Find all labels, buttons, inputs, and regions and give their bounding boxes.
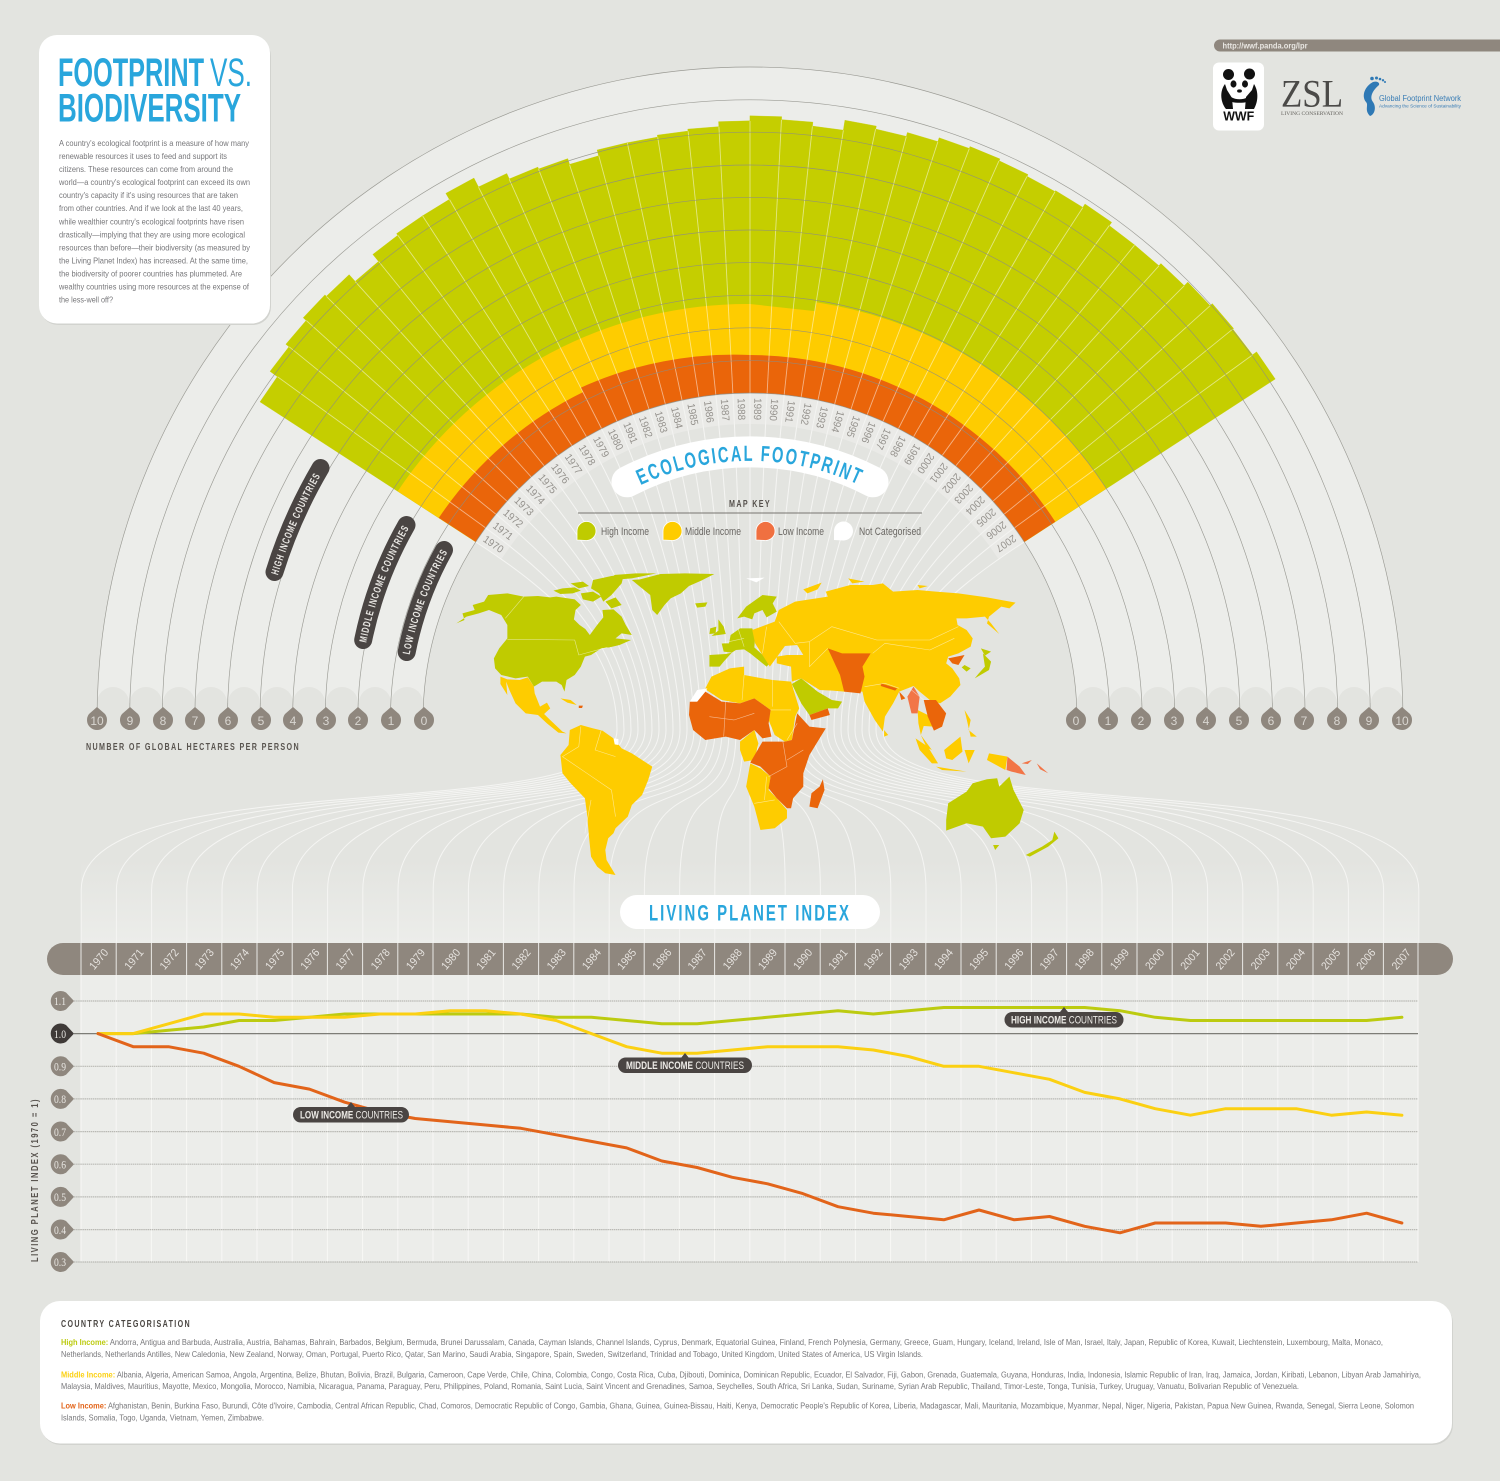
- ecological footprint radial chart: [97, 67, 1403, 734]
- low income list: [61, 1400, 1414, 1422]
- year labels around fan: 1975: [536, 472, 559, 497]
- year header bar: 1971: [122, 947, 146, 972]
- tag: low income countries: LOW INCOME COUNTRIES: [402, 550, 447, 654]
- y axis bubbles: 0.8: [54, 1092, 66, 1106]
- year labels around fan: 1991: [782, 400, 797, 423]
- hectare pins right: 6: [1268, 714, 1275, 728]
- middle income line: [98, 1011, 1402, 1115]
- year labels around fan: 1981: [620, 421, 640, 446]
- year header bar: 1973: [193, 947, 217, 972]
- year labels around fan: 2002: [939, 471, 963, 495]
- hectare pins left: 6: [225, 714, 232, 728]
- year header bar: 1990: [791, 947, 815, 972]
- high income line: [98, 1008, 1402, 1034]
- low income label: [293, 1102, 409, 1122]
- year header bar: 1989: [756, 947, 780, 972]
- year header bar: 1999: [1108, 947, 1132, 972]
- year labels around fan: 1977: [562, 452, 584, 477]
- year labels around fan: 1980: [605, 427, 625, 452]
- year labels around fan: 1998: [887, 434, 908, 459]
- logo: ZSL: LIVING CONSERVATION: [1281, 112, 1343, 117]
- year header bar: 1981: [474, 947, 498, 972]
- high income label: HIGH INCOME COUNTRIES: [1011, 1014, 1117, 1026]
- map key: High Income: [601, 526, 649, 538]
- year header bar: 1975: [263, 947, 287, 972]
- intro text: citizens. These resources can come from around the: [59, 164, 233, 174]
- year header bar: 1988: [721, 947, 745, 972]
- url bar: http://wwf.panda.org/lpr: [1222, 40, 1308, 50]
- year header bar: 2004: [1284, 947, 1308, 972]
- hectare pins right: 3: [1171, 714, 1178, 728]
- hectare pins left: 7: [192, 714, 199, 728]
- year header bar: 1982: [510, 947, 534, 972]
- panel: country categorisation: [40, 1301, 1453, 1445]
- year labels around fan: 1987: [718, 399, 731, 422]
- year labels around fan: 2005: [973, 506, 998, 529]
- title: BIODIVERSITY: [58, 86, 241, 130]
- hectare pins left: 4: [290, 714, 297, 728]
- low income line: [98, 1034, 1402, 1233]
- year labels around fan: 2001: [927, 460, 950, 485]
- flow lines from fan to chart columns: [81, 393, 1419, 943]
- middle income list: [61, 1370, 1421, 1391]
- hectare pins left: 2: [355, 714, 362, 728]
- hectare pins right: 4: [1203, 714, 1210, 728]
- year labels around fan: 1986: [701, 400, 716, 424]
- title: VS.: [210, 51, 252, 95]
- year header bar: 2006: [1354, 947, 1378, 972]
- year header bar: 1991: [826, 947, 850, 972]
- low income regions: [579, 648, 965, 808]
- year header bar: 1997: [1038, 947, 1062, 972]
- year labels around fan: 2006: [984, 518, 1009, 541]
- intro text: resources than before—their biodiversity (as measured by: [59, 242, 251, 252]
- world map: [446, 573, 1058, 875]
- intro text: world—a country's ecological footprint can exceed its own: [58, 177, 250, 187]
- low income label: LOW INCOME COUNTRIES: [300, 1110, 403, 1122]
- year header bar: 2000: [1143, 947, 1167, 972]
- year header bar: 1986: [650, 947, 674, 972]
- y axis bubbles: 0.9: [54, 1060, 66, 1074]
- year labels around fan: [481, 398, 1018, 556]
- inner disc and lower fade: [80, 393, 1420, 763]
- year header bar: 1985: [615, 947, 639, 972]
- hectare pins right: 8: [1334, 714, 1341, 728]
- hectare pins right: 10: [1395, 714, 1409, 728]
- year labels around fan: 1997: [873, 426, 893, 452]
- intro text: from other countries. And if we look at the last 40 years,: [59, 203, 243, 213]
- year labels around fan: 1983: [652, 410, 670, 434]
- high income wedges: [260, 116, 1275, 734]
- high income list: [61, 1337, 1383, 1359]
- hectare pins left: 10: [90, 714, 104, 728]
- year labels around fan: 1972: [501, 507, 525, 531]
- title: FOOTPRINT: [58, 51, 204, 95]
- middle income list: Malaysia, Maldives, Mauritius, Mayotte, Mexico, Mongolia, Morocco, Namibia, Nicaragua, Panama, Paraguay, Peru, Philippines, Poland, Romania, Saint Lucia, Saint Vincent and Grenadines, Samoa, Seychelles, South Africa, Sri Lanka, Sudan, Suriname, Syrian Arab Republic, Thailand, Timor-Leste, Tonga, Tunisia, Turkey, Uruguay, Vanuatu, Bolivarian Republic of Venezuela.: [61, 1381, 1299, 1391]
- y axis bubbles: 1.0: [54, 1027, 66, 1041]
- intro text: the less-well off?: [59, 295, 113, 305]
- middle income label: MIDDLE INCOME COUNTRIES: [626, 1060, 744, 1072]
- year header bar: 1994: [932, 947, 956, 972]
- year labels around fan: 1985: [684, 402, 700, 426]
- y axis bubbles: 0.5: [54, 1190, 66, 1204]
- year header bar: 1993: [897, 947, 921, 972]
- year labels around fan: 1990: [767, 398, 780, 421]
- year labels around fan: 1995: [843, 414, 862, 439]
- year header bar: 1987: [686, 947, 710, 972]
- hectares axis label: NUMBER OF GLOBAL HECTARES PER PERSON: [86, 741, 300, 753]
- living planet index heading: LIVING PLANET INDEX: [649, 900, 851, 926]
- intro text: [58, 138, 251, 305]
- map key: Low Income: [778, 526, 824, 538]
- logo: WWF: WWF: [1223, 110, 1255, 124]
- y axis bubbles: 0.7: [54, 1125, 66, 1139]
- year header bar: 1976: [298, 947, 322, 972]
- logo: Global Footprint Network: [1364, 76, 1462, 116]
- tag: high income countries: HIGH INCOME COUNTRIES: [271, 474, 320, 575]
- url bar: [1214, 40, 1500, 52]
- lighter low income regions: [907, 687, 1048, 775]
- ecological footprint curved heading: ECOLOGICAL FOOTPRINT: [635, 446, 864, 485]
- year labels around fan: 1976: [548, 461, 571, 486]
- country borders: [505, 597, 958, 833]
- hectare pins right: 0: [1073, 714, 1080, 728]
- year header bar: 1980: [439, 947, 463, 972]
- year header bar: 1998: [1073, 947, 1097, 972]
- panel: intro: [39, 35, 271, 325]
- map key: [577, 498, 922, 540]
- year labels around fan: 1978: [576, 443, 598, 468]
- year header bar: 1984: [580, 947, 604, 972]
- intro text: country's capacity if it's using resources that are taken: [59, 190, 238, 200]
- year labels around fan: 1974: [523, 483, 547, 507]
- year header bar: 1977: [334, 947, 358, 972]
- hectare pins right: 1: [1105, 714, 1112, 728]
- year labels around fan: 1989: [751, 398, 763, 420]
- hectare pins right: 5: [1236, 714, 1243, 728]
- living planet line chart: [51, 975, 1418, 1272]
- y axis bubbles: 0.6: [54, 1157, 66, 1171]
- not categorised regions: [613, 578, 765, 745]
- hectare pins left: [87, 707, 434, 730]
- high income regions: [446, 573, 1058, 857]
- low income list: Islands, Somalia, Togo, Uganda, Vietnam, Yemen, Zimbabwe.: [61, 1412, 264, 1422]
- living planet index heading: [620, 895, 880, 929]
- year header bar: 1978: [369, 947, 393, 972]
- intro text: drastically—implying that they are using more ecological: [59, 229, 245, 239]
- year header bar: 1970: [87, 947, 111, 972]
- hectare pins right: 9: [1366, 714, 1373, 728]
- year labels around fan: 2000: [914, 451, 937, 476]
- logo: WWF: [1213, 62, 1264, 130]
- high income list: High Income: Andorra, Antigua and Barbuda, Australia, Austria, Bahamas, Bahrain, Barbados, Belgium, Bermuda, Brunei Darussalam, Canada, Cayman Islands, Channel Islands, Cyprus, Denmark, Equatorial Guinea, Finland, French Polynesia, Germany, Greece, Guam, Hungary, Iceland, Ireland, Isle of Man, Israel, Italy, Japan, Republic of Korea, Kuwait, Liechtenstein, Luxembourg, Malta, Monaco,: [61, 1337, 1383, 1347]
- tag: middle income countries: MIDDLE INCOME COUNTRIES: [359, 526, 408, 642]
- year labels around fan: 1994: [828, 409, 846, 434]
- chart column fade: [81, 860, 1418, 943]
- categorisation heading: COUNTRY CATEGORISATION: [61, 1318, 191, 1330]
- year header bar: 1995: [967, 947, 991, 972]
- middle income regions: [500, 578, 1016, 875]
- year labels around fan: 1970: [481, 533, 506, 556]
- year labels around fan: 1993: [813, 405, 830, 430]
- year header bar: 1974: [228, 947, 252, 972]
- year header bar: 2001: [1178, 947, 1202, 972]
- y axis title: LIVING PLANET INDEX (1970 = 1): [29, 1098, 41, 1262]
- year labels around fan: 2007: [993, 532, 1018, 554]
- year header bar: 1983: [545, 947, 569, 972]
- y axis bubbles: [51, 991, 74, 1272]
- year labels around fan: 1971: [490, 520, 515, 543]
- year header bar: 2005: [1319, 947, 1343, 972]
- intro text: while wealthier country's ecological footprints have risen: [58, 216, 244, 226]
- year labels around fan: 1988: [735, 398, 747, 420]
- year labels around fan: 1979: [590, 435, 611, 460]
- year labels around fan: 1973: [512, 495, 536, 519]
- hectare pins left: 0: [421, 714, 428, 728]
- intro text: wealthy countries using more resources at the expense of: [58, 282, 250, 292]
- year header bar: 1979: [404, 947, 428, 972]
- grid lines: [74, 1001, 1418, 1262]
- hectare pins left: 1: [388, 714, 395, 728]
- hectare pins right: [1066, 707, 1412, 730]
- year header bar: 2007: [1390, 947, 1414, 972]
- intro text: the Living Planet Index) has increased. At the same time,: [59, 255, 248, 265]
- year header bar: 1992: [862, 947, 886, 972]
- logo: Global Footprint Network: Advancing the Science of Sustainability: [1379, 104, 1462, 109]
- year labels around fan: 1984: [668, 406, 685, 430]
- intro text: A country's ecological footprint is a measure of how many: [59, 138, 250, 148]
- year header bar: [47, 943, 1453, 975]
- hectare pins left: 8: [160, 714, 167, 728]
- hectare pins left: 5: [258, 714, 265, 728]
- high income list: Netherlands, Netherlands Antilles, New Caledonia, New Zealand, Norway, Oman, Portugal, Puerto Rico, Qatar, San Marino, Saudi Arabia, Singapore, Spain, Sweden, Switzerland, Trinidad and Tobago, United Kingdom, United States of America, US Virgin Islands.: [61, 1349, 923, 1359]
- year labels around fan: 2003: [951, 482, 975, 506]
- logo: ZSL: ZSL: [1281, 72, 1343, 116]
- hectare pins left: 9: [127, 714, 134, 728]
- year header bar: 2002: [1214, 947, 1238, 972]
- y axis bubbles: 0.3: [54, 1255, 66, 1269]
- logo: Global Footprint Network: Global Footprint Network: [1379, 94, 1462, 103]
- low income band: [439, 355, 1055, 720]
- intro text: renewable resources it uses to feed and support its: [59, 151, 227, 161]
- year labels around fan: 1992: [798, 402, 814, 426]
- map key: Not Categorised: [859, 526, 921, 538]
- year header bar: 1972: [158, 947, 182, 972]
- middle income label: [618, 1053, 752, 1073]
- intro text: the biodiversity of poorer countries has plummeted. Are: [59, 268, 242, 278]
- high income label: [1004, 1007, 1124, 1028]
- ring lines with hectare scale: [97, 67, 1403, 720]
- hectare pins right: 7: [1301, 714, 1308, 728]
- year labels around fan: 1982: [636, 415, 655, 440]
- hectare pins left: 3: [323, 714, 330, 728]
- radial year dividers: [278, 120, 1252, 528]
- year labels around fan: 1996: [858, 420, 878, 445]
- map key: MAP KEY: [729, 498, 771, 510]
- year labels around fan: 1999: [901, 442, 923, 467]
- middle income band: [398, 302, 1106, 720]
- title: [58, 51, 252, 130]
- map key: Middle Income: [685, 526, 741, 538]
- year labels around fan: 2004: [963, 493, 987, 517]
- year header bar: 1996: [1002, 947, 1026, 972]
- y axis bubbles: 1.1: [54, 994, 66, 1008]
- hectare pins right: 2: [1138, 714, 1145, 728]
- y axis bubbles: 0.4: [54, 1223, 66, 1237]
- year header bar: 2003: [1249, 947, 1273, 972]
